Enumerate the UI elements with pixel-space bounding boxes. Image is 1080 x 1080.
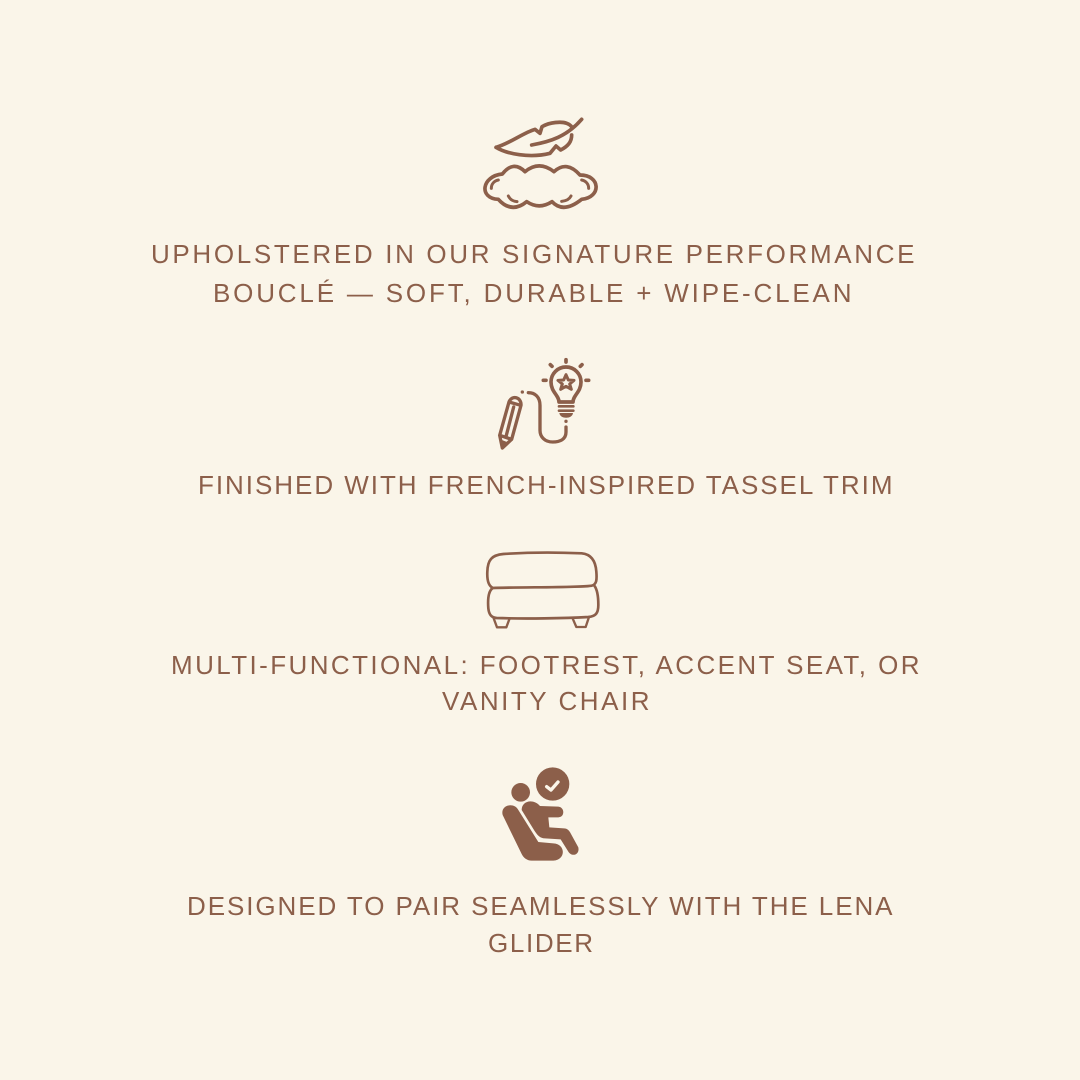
icon: feather above cloud bbox=[485, 119, 596, 207]
text: multi-functional bbox=[171, 650, 919, 716]
text: multi-functional: VANITY CHAIR bbox=[442, 686, 650, 716]
icon: seated person with check bbox=[502, 767, 579, 861]
text: lena glider bbox=[187, 891, 893, 958]
text: lena glider: DESIGNED TO PAIR SEAMLESSLY WITH THE LENA bbox=[187, 891, 893, 921]
icon: pencil and light bulb bbox=[500, 360, 589, 448]
heading: boucle text: UPHOLSTERED IN OUR SIGNATURE PERFORMANCE bbox=[151, 239, 914, 269]
text: tassel trim: FINISHED WITH FRENCH-INSPIRED TASSEL TRIM bbox=[198, 470, 892, 500]
heading: boucle text bbox=[151, 239, 914, 308]
text: multi-functional: MULTI-FUNCTIONAL: FOOTREST, ACCENT SEAT, OR bbox=[171, 650, 919, 680]
heading: boucle text: BOUCLÉ — SOFT, DURABLE + WIPE-CLEAN bbox=[213, 278, 852, 308]
icon: ottoman bbox=[487, 553, 598, 627]
text: lena glider: GLIDER bbox=[488, 928, 593, 958]
